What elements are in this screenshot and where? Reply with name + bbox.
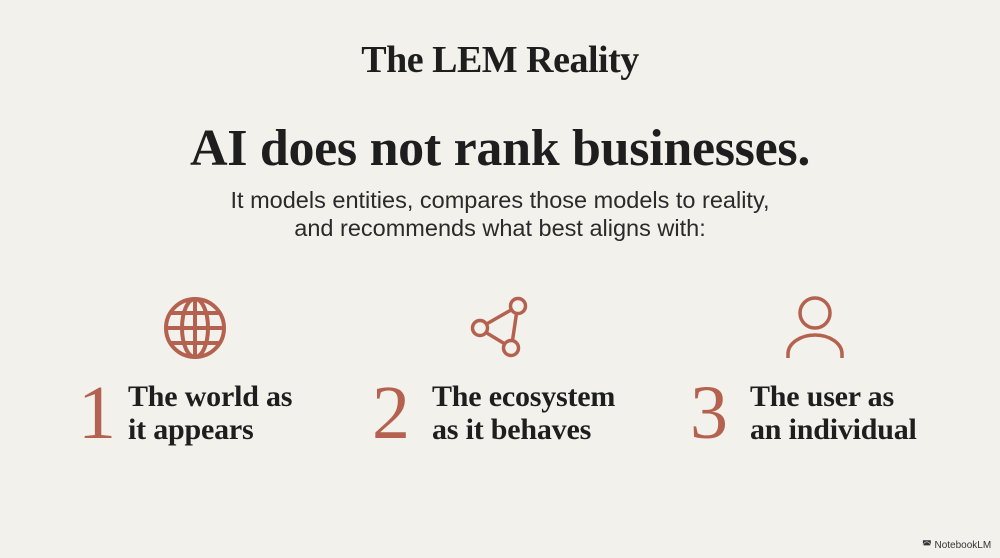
subtitle — [230, 187, 770, 241]
item 2: 2 — [372, 371, 410, 455]
item 3 — [690, 371, 917, 455]
headline: AI does not rank businesses. — [190, 120, 810, 177]
item 2: The ecosystem — [432, 380, 615, 413]
icon: network — [470, 296, 528, 358]
icon: globe — [164, 297, 226, 359]
title: The LEM Reality — [361, 39, 639, 81]
item 3: 3 — [690, 371, 728, 455]
item 3: The user as — [750, 380, 894, 413]
watermark: ◚ NotebookLM — [922, 540, 991, 551]
subtitle: It models entities, compares those models to reality, — [230, 187, 770, 213]
item 1: The world as — [128, 380, 292, 413]
item 2 — [372, 371, 615, 455]
item 2: as it behaves — [432, 413, 591, 446]
item 3: an individual — [750, 413, 917, 446]
item 1 — [78, 371, 292, 455]
item 1: 1 — [78, 371, 116, 455]
subtitle: and recommends what best aligns with: — [294, 215, 706, 241]
item 1: it appears — [128, 413, 254, 446]
icon: person — [786, 296, 844, 358]
